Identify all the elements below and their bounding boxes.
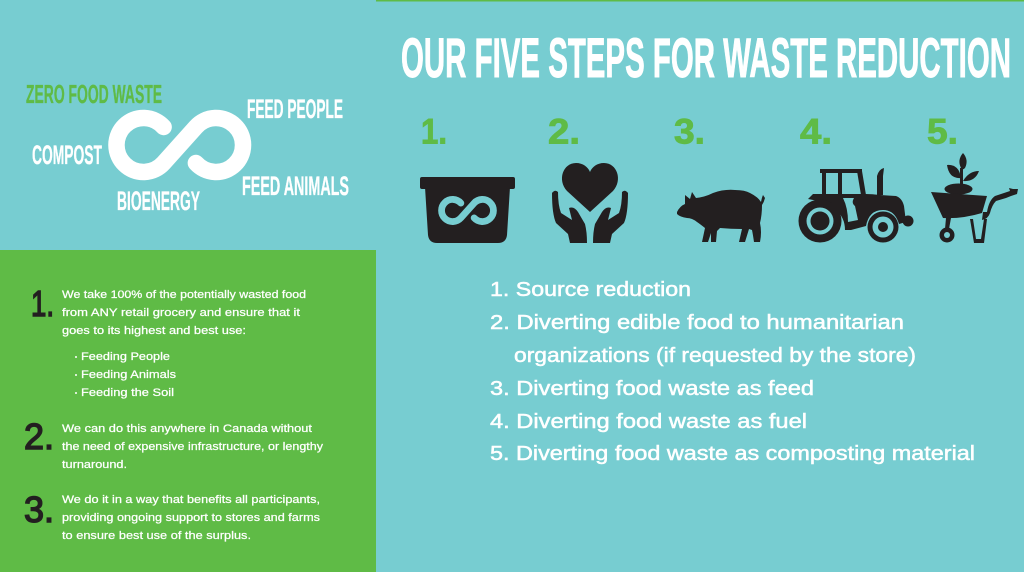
icon: wheelbarrow with plant [931,153,1018,243]
steps list: organizations (if requested by the store) [514,345,916,367]
icon: white infinity loop [116,118,243,172]
point 2 text: the need of expensive infrastructure, or lengthy [62,441,324,453]
steps list: 3. Diverting food waste as feed [490,378,814,400]
step numbers: 4. [800,112,832,152]
steps list: 4. Diverting food waste as fuel [490,411,807,433]
point 1 text: goes to its highest and best use: [62,325,246,337]
icon: heart in hands [552,163,628,243]
point 1 number: 1. [31,283,54,324]
point 1 bullet list [75,351,177,399]
point 1 bullet list: Feeding People [81,351,170,363]
step numbers: 3. [674,112,705,152]
point 1 text: We take 100% of the potentially wasted food [62,289,306,301]
step numbers: 5. [927,112,958,152]
panel: zero food waste logo [26,79,349,216]
steps list: 2. Diverting edible food to humanitarian [490,312,904,334]
point 2 text [62,423,324,471]
point 1 bullet list: Feeding the Soil [81,387,174,399]
label: zero food waste: ZERO FOOD WASTE [26,79,162,109]
step numbers: 2. [548,112,580,152]
point 3 text [62,494,321,542]
panel: green key points [0,250,376,572]
point 1 text: from ANY retail grocery and ensure that it [62,307,300,319]
point 2 text: We can do this anywhere in Canada without [62,423,312,435]
point 3 text: to ensure best use of the surplus. [62,530,251,542]
steps list [490,279,975,465]
label: feed people: FEED PEOPLE [247,94,343,124]
point 1 text [62,289,306,337]
point 2 text: turnaround. [62,459,127,471]
step numbers: 1. [421,112,447,152]
point 3 number: 3. [24,489,54,530]
step numbers [421,112,958,152]
label: compost: COMPOST [32,140,102,170]
point 3 text: We do it in a way that benefits all participants, [62,494,320,506]
label: feed animals: FEED ANIMALS [242,171,349,201]
point 3 text: providing ongoing support to stores and farms [62,512,321,524]
steps list: 5. Diverting food waste as composting material [490,443,975,465]
icon: tractor [798,168,914,242]
point 2 number: 2. [24,416,54,457]
icon: bin with infinity [420,177,515,243]
point 1 bullet list: Feeding Animals [81,369,177,381]
steps list: 1. Source reduction [490,279,691,301]
icon: pig [677,190,765,242]
label: bioenergy: BIOENERGY [117,186,200,216]
